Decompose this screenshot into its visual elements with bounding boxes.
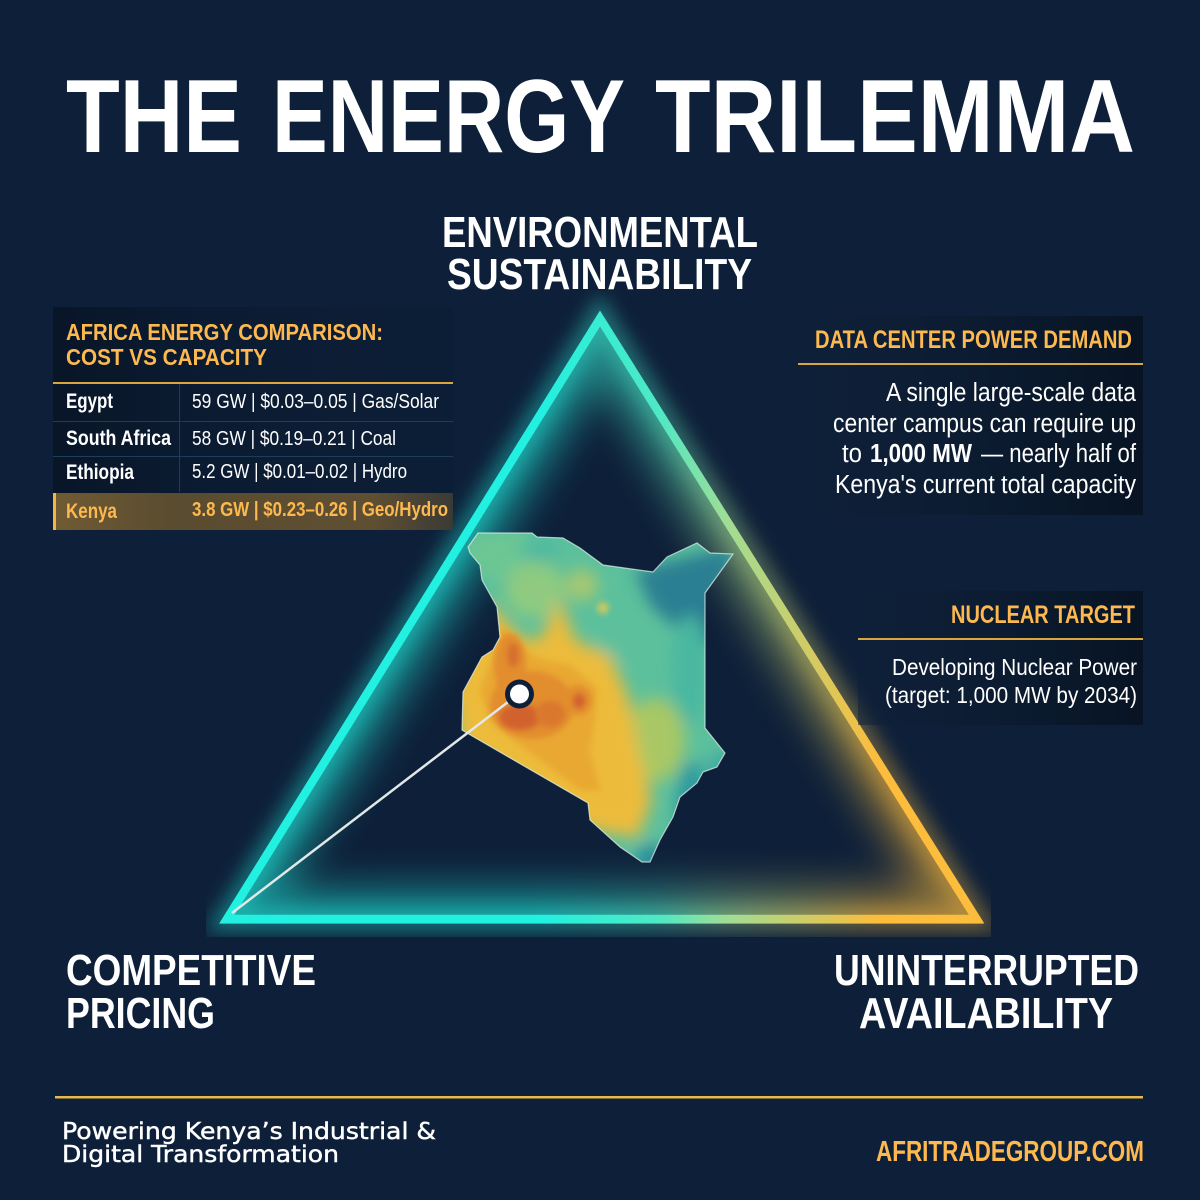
title (66, 59, 1135, 175)
body text: 1,000 MW (870, 440, 973, 468)
heading: environmental sustainability (442, 208, 758, 299)
row: ethiopia: Ethiopia (66, 461, 134, 484)
panel: africa energy comparison (53, 307, 453, 530)
title: ENERGY (272, 59, 625, 175)
body text: — nearly half of (981, 440, 1137, 468)
body text (833, 379, 1137, 499)
body text: center campus can require up (833, 410, 1136, 438)
body text (885, 654, 1137, 708)
heading: environmental sustainability: SUSTAINABILITY (447, 250, 752, 299)
row: south africa: South Africa (66, 427, 171, 450)
panel: data center power demand (798, 316, 1143, 515)
icon: location marker (505, 680, 534, 708)
panel heading: COST VS CAPACITY (66, 344, 267, 370)
heading: uninterrupted availability: AVAILABILITY (859, 989, 1113, 1038)
body text: (target: 1,000 MW by 2034) (885, 682, 1137, 708)
row: ethiopia (66, 461, 407, 484)
tagline: Digital Transformation (62, 1142, 339, 1168)
row: ethiopia: 5.2 GW | $0.01–0.02 | Hydro (192, 461, 407, 483)
body text: Kenya's current total capacity (835, 471, 1136, 499)
row: kenya highlighted: Kenya (66, 500, 117, 523)
heading: uninterrupted availability: UNINTERRUPTED (834, 946, 1139, 995)
body text: A single large-scale data (886, 379, 1137, 407)
energy trilemma triangle (219, 312, 984, 924)
tagline (62, 1119, 436, 1168)
row: kenya highlighted (53, 493, 453, 530)
tagline: Powering Kenya’s Industrial & (62, 1119, 436, 1145)
body text: to (842, 440, 862, 468)
title: TRILEMMA (655, 59, 1135, 175)
heading: competitive pricing: COMPETITIVE (66, 946, 316, 995)
heading: competitive pricing (66, 946, 316, 1038)
row: egypt (66, 390, 439, 413)
row: south africa: 58 GW | $0.19–0.21 | Coal (192, 428, 396, 450)
row: egypt: 59 GW | $0.03–0.05 | Gas/Solar (192, 391, 439, 413)
panel heading: AFRICA ENERGY COMPARISON: (66, 319, 383, 345)
title: THE (66, 59, 242, 175)
row: south africa (66, 427, 396, 450)
row: egypt: Egypt (66, 390, 113, 413)
heading: competitive pricing: PRICING (66, 989, 215, 1038)
panel heading: DATA CENTER POWER DEMAND (815, 326, 1132, 354)
panel: nuclear target (858, 591, 1143, 725)
panel heading (66, 319, 383, 370)
panel heading: NUCLEAR TARGET (951, 601, 1135, 629)
body text: Developing Nuclear Power (892, 654, 1137, 680)
row: kenya highlighted: 3.8 GW | $0.23–0.26 | Geo/Hydro (192, 499, 448, 521)
kenya heat map (461, 532, 734, 863)
heading: environmental sustainability: ENVIRONMENTAL (442, 208, 758, 257)
pointer line to competitive pricing corner (232, 702, 508, 913)
heading: uninterrupted availability (834, 946, 1139, 1038)
